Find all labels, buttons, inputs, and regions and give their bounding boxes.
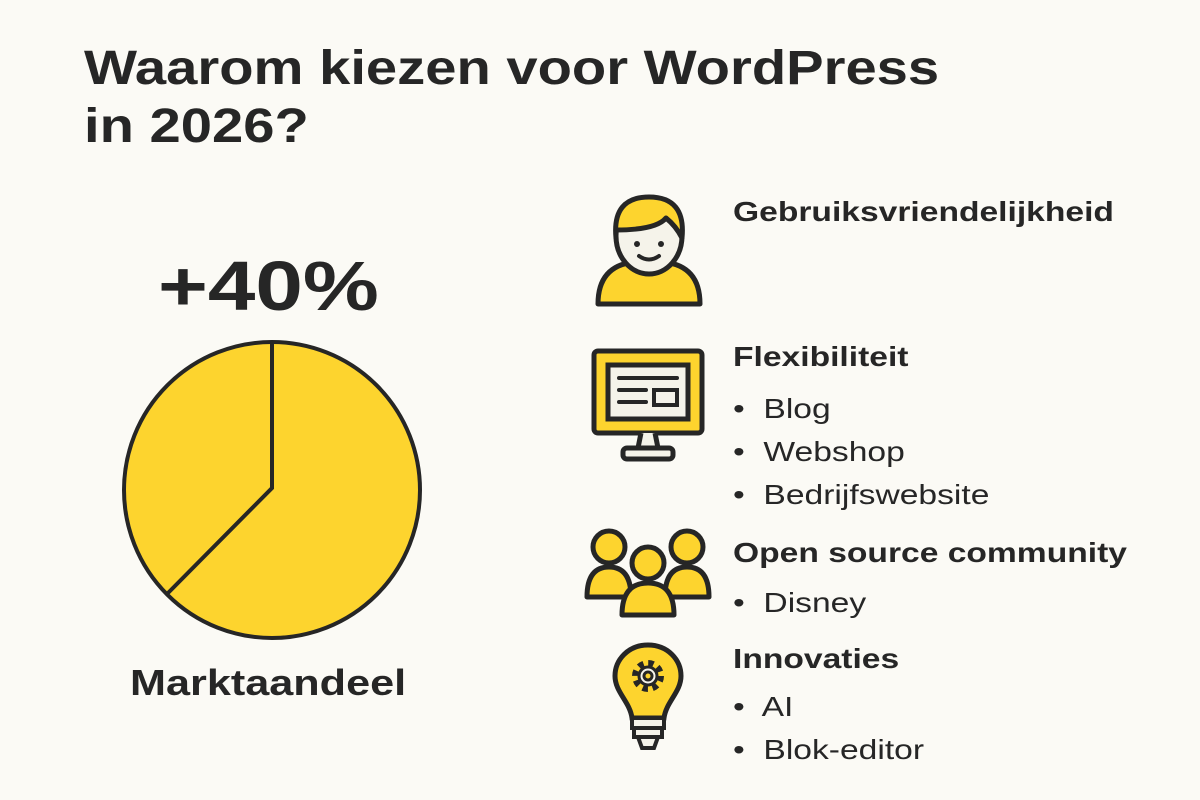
- icon: person: [596, 194, 702, 306]
- heading + list: Flexibiliteit: • Blog: [733, 393, 831, 424]
- heading + list: Flexibiliteit: • Bedrijfswebsite: [733, 479, 989, 510]
- heading + list: Innovaties: Innovaties: [733, 643, 899, 674]
- heading + list: Open source community: • Disney: [733, 587, 866, 618]
- icon: monitor: [592, 348, 704, 462]
- heading: Gebruiksvriendelijkheid: Gebruiksvriendelijkheid: [733, 196, 1114, 227]
- title: [84, 42, 939, 153]
- pie chart: [122, 340, 422, 640]
- heading + list: Flexibiliteit: Flexibiliteit: [733, 341, 908, 372]
- heading + list: Flexibiliteit: [733, 341, 989, 510]
- icon: light bulb with gear: [612, 642, 684, 750]
- heading + list: Open source community: [733, 537, 1127, 618]
- heading + list: Innovaties: • AI: [733, 691, 793, 722]
- heading + list: Open source community: Open source community: [733, 537, 1127, 568]
- heading + list: Innovaties: [733, 643, 924, 765]
- title: Waarom kiezen voor WordPress: [84, 42, 939, 95]
- title: in 2026?: [84, 100, 309, 153]
- icon: group of people: [584, 528, 712, 618]
- label: Marktaandeel: Marktaandeel: [130, 662, 406, 703]
- heading + list: Innovaties: • Blok-editor: [733, 734, 924, 765]
- heading + list: Flexibiliteit: • Webshop: [733, 436, 905, 467]
- stat: +40%: +40%: [158, 247, 379, 325]
